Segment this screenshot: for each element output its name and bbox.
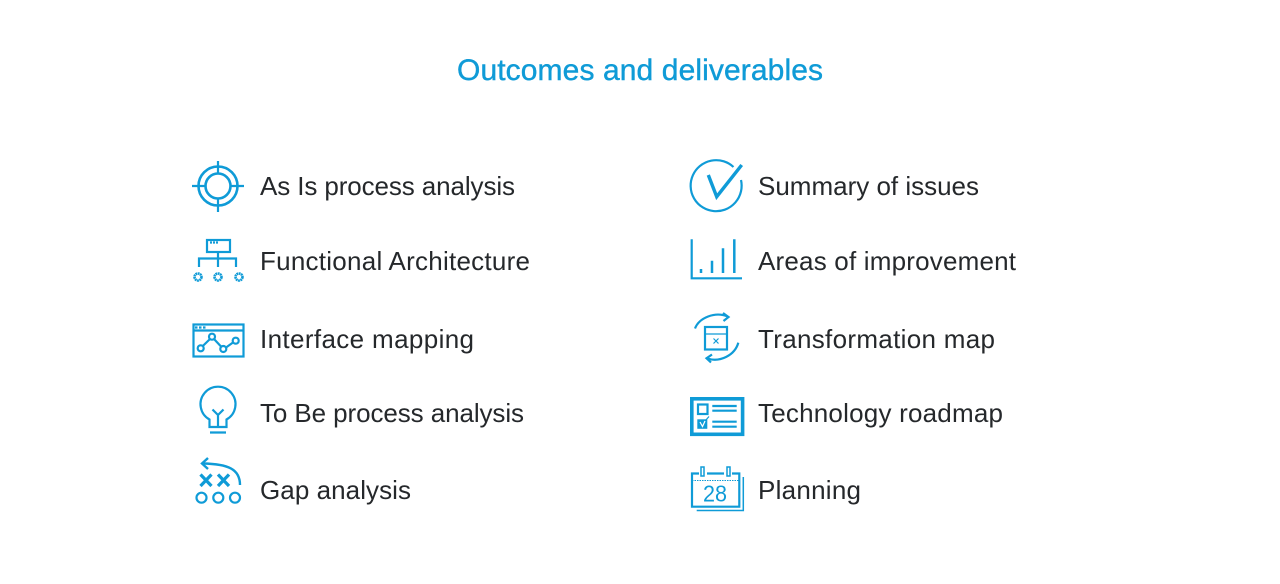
label: Summary of issues: Summary of issues: [758, 171, 979, 201]
item: As Is process analysis: [192, 161, 515, 212]
icon: check in circle: [691, 160, 742, 211]
item: To Be process analysis: [200, 387, 524, 432]
item: Gap analysis: [196, 458, 411, 505]
calendar date: 28: [703, 481, 727, 507]
item: Technology roadmap: [692, 398, 1003, 434]
icon: bar chart: [692, 239, 742, 278]
icon: window with cycle arrows: [695, 313, 738, 362]
icon: hierarchy with gears: [194, 240, 242, 280]
item: Transformation map: [695, 313, 995, 362]
icon: browser window with line chart: [194, 324, 244, 356]
title: Outcomes and deliverables: [457, 54, 823, 87]
label: Gap analysis: Gap analysis: [260, 475, 411, 505]
icon: target: [192, 161, 244, 212]
label: Transformation map: Transformation map: [758, 324, 995, 354]
item: Areas of improvement: [692, 239, 1017, 278]
item: Interface mapping: [194, 324, 474, 356]
label: Functional Architecture: Functional Architecture: [260, 246, 530, 276]
icon: light bulb: [200, 387, 236, 432]
label: Planning: Planning: [758, 475, 861, 505]
label: As Is process analysis: As Is process analysis: [260, 171, 515, 201]
label: Technology roadmap: Technology roadmap: [758, 398, 1003, 428]
item: Summary of issues: [691, 160, 979, 211]
label: To Be process analysis: To Be process analysis: [260, 398, 524, 428]
icon: checklist card: [692, 399, 743, 434]
icon: calendar: [692, 467, 743, 510]
icon: play diagram: [196, 458, 240, 503]
label: Areas of improvement: Areas of improvement: [758, 246, 1017, 276]
item: Planning: [692, 467, 861, 510]
label: Interface mapping: Interface mapping: [260, 324, 474, 354]
item: Functional Architecture: [194, 240, 530, 280]
